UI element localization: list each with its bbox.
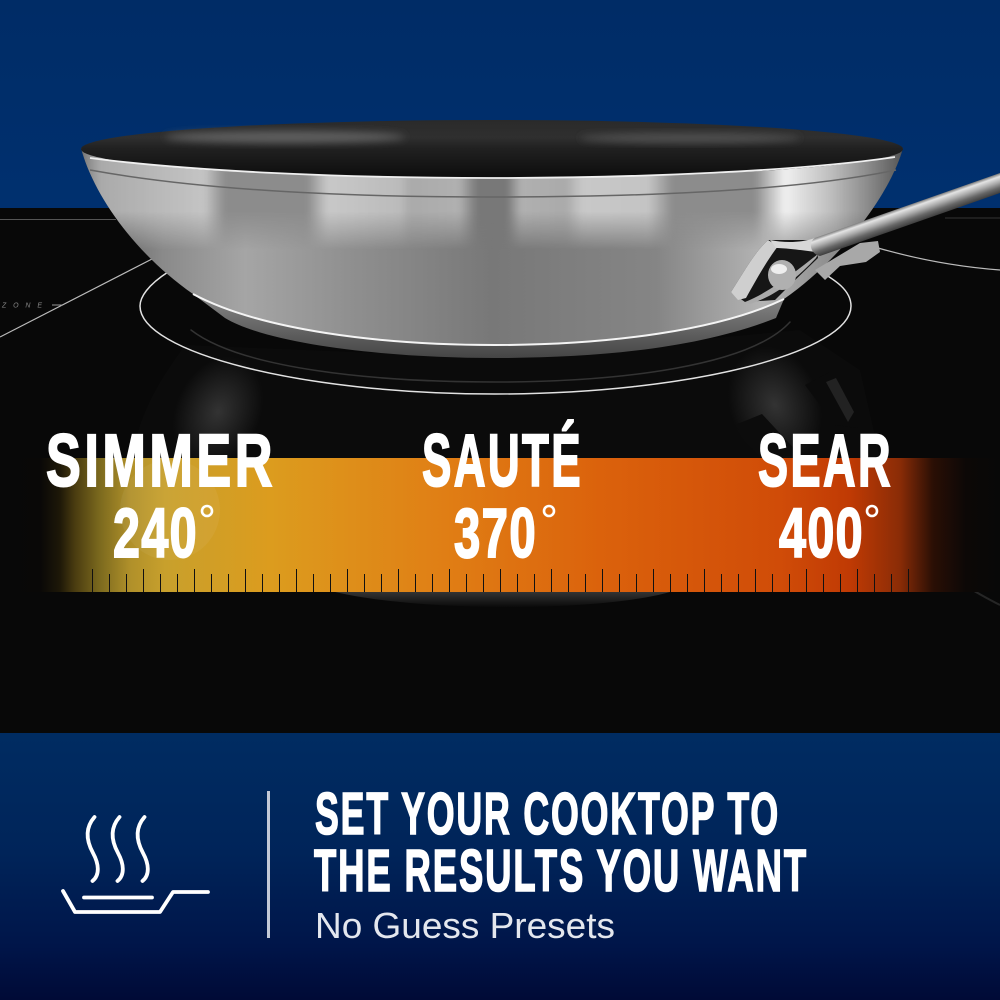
handle tube bbox=[811, 173, 1000, 256]
label: saute 370: 370 bbox=[454, 494, 537, 572]
pan base lip bbox=[193, 294, 784, 358]
label: simmer 240: 240 bbox=[113, 494, 198, 572]
pan rim groove bbox=[90, 170, 896, 197]
handle bracket bbox=[731, 240, 818, 302]
pan body bbox=[81, 148, 903, 346]
icon: steaming pan bbox=[63, 817, 208, 912]
frying pan bbox=[81, 120, 1000, 360]
handle rivet bbox=[768, 260, 796, 290]
label: sear 400: 400 bbox=[779, 494, 864, 572]
label: saute 370: SAUTÉ bbox=[422, 419, 583, 502]
interior sheen right bbox=[580, 133, 800, 143]
temperature scale ticks bbox=[92, 569, 908, 592]
pan interior bbox=[81, 120, 903, 178]
label: simmer 240 bbox=[46, 419, 276, 572]
label: simmer 240: SIMMER bbox=[46, 419, 276, 502]
label: sear 400: SEAR bbox=[758, 419, 893, 502]
cooktop surface bbox=[0, 208, 1000, 734]
band gloss on left bbox=[120, 460, 220, 560]
pan reflection on cooktop bbox=[132, 330, 1000, 605]
subheading: No Guess Presets bbox=[315, 905, 615, 946]
reflection below band bbox=[335, 592, 670, 607]
label: sear 400 bbox=[758, 419, 893, 572]
footer panel bbox=[0, 733, 1000, 1000]
induction zone ring bbox=[140, 270, 851, 394]
cooktop zone lines bbox=[0, 218, 1000, 337]
pan base highlight line bbox=[193, 294, 784, 345]
pan body highlights bbox=[82, 150, 902, 245]
background: navy wall bbox=[0, 0, 1000, 209]
cooktop zone label: ZONE bbox=[1, 302, 42, 310]
interior sheen left bbox=[165, 131, 405, 143]
handle joint bbox=[770, 238, 816, 252]
handle lower bracket bbox=[815, 241, 880, 280]
rim highlight bbox=[90, 157, 895, 178]
temperature band bbox=[0, 458, 1000, 607]
headline and subheading bbox=[314, 781, 808, 946]
label: saute 370 bbox=[422, 419, 583, 572]
divider bbox=[267, 791, 270, 938]
